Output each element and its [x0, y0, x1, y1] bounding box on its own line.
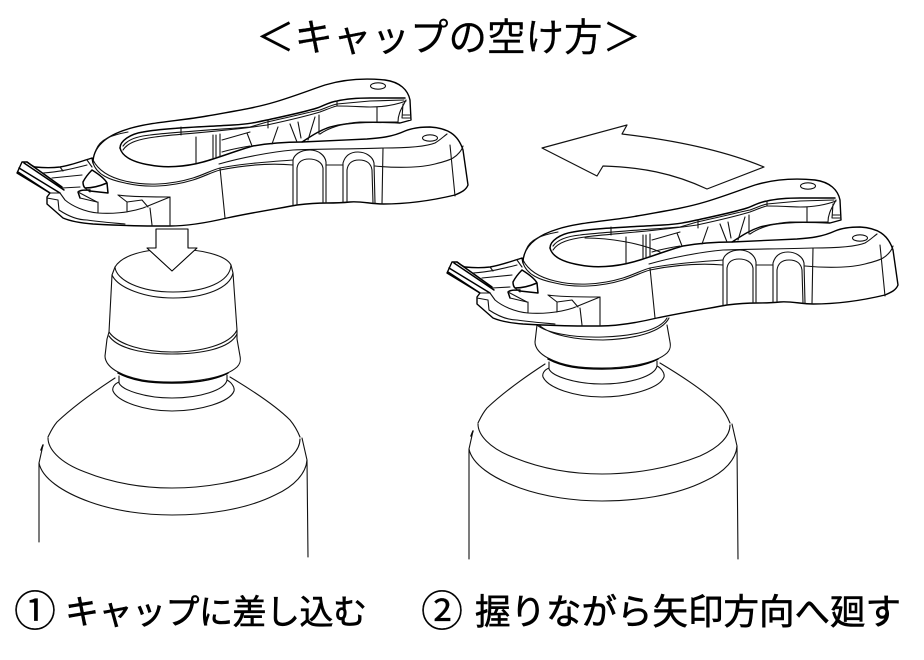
caption: step 2: ② — [421, 588, 463, 635]
title: ＜キャップの空け方＞ — [256, 17, 641, 60]
arrow: turning direction — [542, 125, 764, 189]
caption: step 1 — [14, 588, 366, 635]
panel: step 1 insert into cap — [17, 79, 468, 557]
caption: step 1: ① — [14, 588, 56, 635]
bottle 1 cap — [107, 249, 237, 354]
bottle 2 — [469, 318, 738, 559]
caption: step 1: キャップに差し込む — [65, 594, 366, 632]
panel: step 2 turn opener — [447, 125, 898, 559]
opener 2 — [447, 179, 898, 326]
caption: step 2: 握りながら矢印方向へ廻す — [475, 592, 901, 632]
opener 1 — [17, 79, 468, 226]
bottle 1 body — [39, 339, 308, 557]
arrow: push down — [147, 229, 197, 271]
cap seen through opener ring — [585, 238, 660, 252]
